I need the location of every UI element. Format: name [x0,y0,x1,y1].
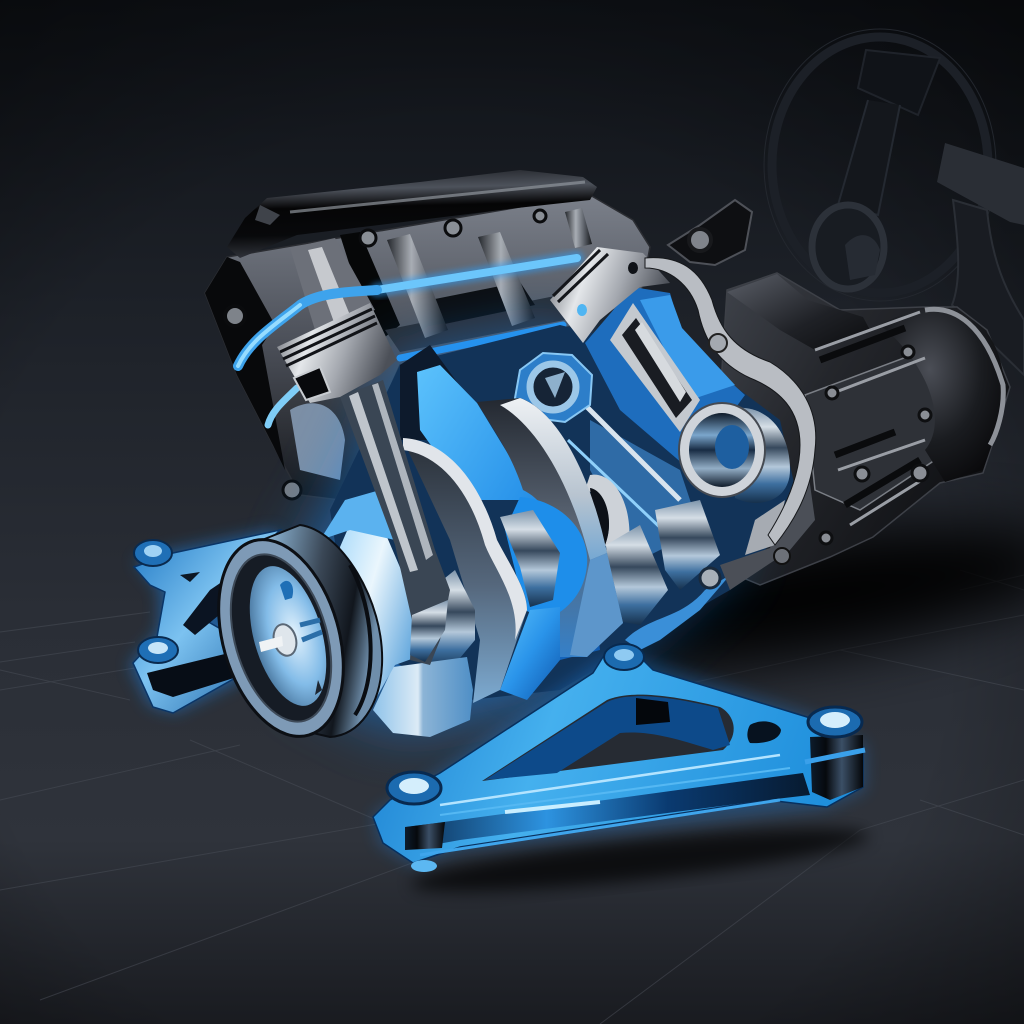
arm inner hole [482,695,734,781]
front connecting rod [340,380,450,665]
arm hole shadow [636,698,670,725]
front crank journal [420,570,475,670]
left bushing [405,822,445,850]
front piston [277,303,397,403]
blue crankcase glow [300,330,730,730]
bolts [387,644,862,872]
right bushing [810,735,863,800]
right section base [330,287,800,700]
valve stem 3 [565,208,592,248]
rear piston [550,247,670,343]
pulley [197,525,382,751]
crank bright blue web [417,365,600,660]
arm body [373,657,863,863]
ghost flywheel and connecting rod [764,29,1024,375]
large silver counterweight [477,398,623,657]
blue light bands on head [238,258,577,425]
rear connecting rod [610,303,700,432]
gearbox housing [668,200,1010,585]
left mount arm [130,530,300,713]
valve stem 2 [478,232,535,326]
middle counterweight [403,438,527,703]
lower mount arm [373,644,865,872]
crank journal [500,497,587,700]
pale lower web [320,490,473,737]
arm highlights [420,755,790,855]
small wrist pin ring [515,353,592,422]
floor grid [0,570,1024,1024]
ground shadow under engine [409,497,1024,904]
arm inner wall [485,696,730,780]
rear big end ring [679,334,790,503]
lower right bearings [585,470,815,650]
housing silver arc [645,258,816,545]
valve stem 1 [387,234,448,338]
arm lower web [405,773,810,850]
cylinder head block [205,195,650,500]
crank dark cover [400,345,470,440]
valve cover [227,170,597,258]
bushing collar [805,750,865,762]
arm small hole [747,721,781,743]
